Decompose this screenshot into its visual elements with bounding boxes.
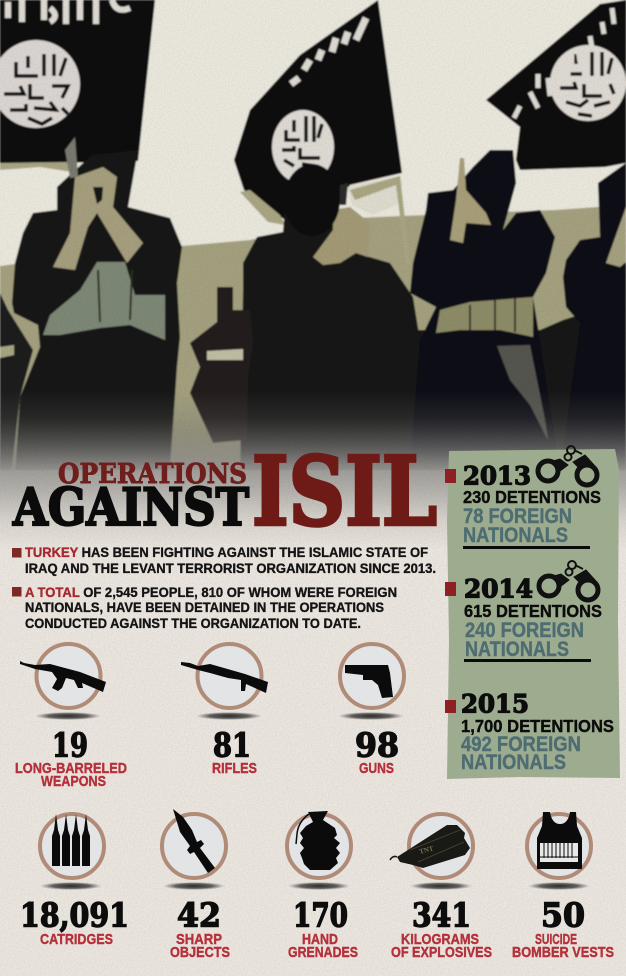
icon: grenade <box>296 811 340 870</box>
icon: pistol <box>345 665 393 698</box>
stat: rifles: RIFLES <box>212 761 257 777</box>
stat: guns <box>338 644 404 777</box>
stat: suicide bomber vests: BOMBER VESTS <box>512 945 614 961</box>
stat: guns: 98 <box>355 726 399 764</box>
icon: assault rifle <box>20 661 106 692</box>
intro paragraph 2 <box>12 585 397 631</box>
photo: masked fighters with black flags <box>0 0 626 470</box>
stat: rifles <box>181 644 268 777</box>
stat: guns: GUNS <box>359 761 394 777</box>
fighter left <box>12 137 182 470</box>
dark lower mass <box>240 290 626 470</box>
stat: long-barreled weapons: WEAPONS <box>41 774 106 790</box>
2013 block: 78 FOREIGN <box>463 505 572 528</box>
2015 block: NATIONALS <box>461 751 566 774</box>
title <box>12 436 437 548</box>
fighter far right <box>560 163 626 470</box>
fighter centre <box>243 164 420 470</box>
icon: bullets <box>52 814 90 866</box>
2015 block: 2015 <box>461 690 529 718</box>
stat: sharp objects: 42 <box>177 896 221 934</box>
intro paragraph 1 <box>12 545 436 576</box>
fighter background <box>190 287 253 443</box>
stat: long-barreled weapons: 19 <box>52 726 88 764</box>
stat: long-barreled weapons: LONG-BARRELED <box>15 761 127 777</box>
icon: TNT bundle: TNT <box>418 844 435 856</box>
icon: TNT bundle <box>390 825 470 868</box>
stat: sharp objects: SHARP <box>176 932 222 948</box>
fighter far left <box>0 293 33 470</box>
stat: cartridges: 18,091 <box>20 896 129 934</box>
2015 block: 1,700 DETENTIONS <box>461 716 614 736</box>
icon: handcuffs 2013 <box>538 446 597 485</box>
panel: detentions by year <box>445 446 620 779</box>
stat: sharp objects: OBJECTS <box>170 945 230 961</box>
stat: hand grenades: GRENADES <box>288 945 358 961</box>
stat: sharp objects <box>162 809 230 961</box>
stat: cartridges <box>20 814 129 948</box>
2013 block <box>445 462 601 549</box>
bullet <box>12 548 22 558</box>
2014 block: 240 FOREIGN <box>465 619 584 642</box>
2014 block: 615 DETENTIONS <box>464 601 602 621</box>
stat: suicide bomber vests: SUICIDE <box>535 932 577 948</box>
flag center <box>234 0 410 263</box>
stat: suicide bomber vests <box>512 812 614 961</box>
stat: hand grenades <box>287 811 358 961</box>
photo hillside <box>0 205 626 470</box>
title: against: AGAINST <box>12 478 249 538</box>
flag right <box>486 0 626 170</box>
stat: kilograms of explosives: KILOGRAMS <box>401 932 479 948</box>
title: ISIL: ISIL <box>252 436 437 548</box>
flag left <box>0 0 155 172</box>
photo sky <box>0 0 626 300</box>
stat: kilograms of explosives: 341 <box>412 896 471 934</box>
icon: vest <box>537 812 582 869</box>
bullet <box>12 587 22 596</box>
fighter right <box>410 150 560 470</box>
2014 block: 2014 <box>464 574 533 604</box>
stat: kilograms of explosives: OF EXPLOSIVES <box>391 945 492 961</box>
stat: long-barreled weapons <box>15 644 127 790</box>
photo fade to paper <box>0 360 626 550</box>
2015 block: 492 FOREIGN <box>461 733 581 756</box>
intro paragraph 2: NATIONALS, HAVE BEEN DETAINED IN THE OPERATIONS <box>25 600 384 615</box>
icon: rifle <box>181 662 268 693</box>
intro paragraph 2: A TOTAL OF 2,545 PEOPLE, 810 OF WHOM WERE FOREIGN <box>25 585 397 600</box>
stat: suicide bomber vests: 50 <box>541 896 585 934</box>
stat: cartridges: CATRIDGES <box>40 932 113 948</box>
2014 block <box>445 574 602 662</box>
2015 block <box>445 690 614 774</box>
icon: handcuffs 2014 <box>539 561 598 600</box>
stat: hand grenades: HAND <box>302 932 338 948</box>
stat: hand grenades: 170 <box>293 896 348 934</box>
2013 block: NATIONALS <box>463 524 568 547</box>
icon: knife <box>173 809 215 873</box>
intro paragraph 2: CONDUCTED AGAINST THE ORGANIZATION TO DATE. <box>25 616 361 631</box>
title: operations: OPERATIONS <box>58 459 247 490</box>
2013 block: 2013 <box>463 462 531 490</box>
2013 block: 230 DETENTIONS <box>463 487 601 507</box>
stat: kilograms of explosives <box>390 814 492 961</box>
stat: rifles: 81 <box>213 726 251 764</box>
intro paragraph 1: IRAQ AND THE LEVANT TERRORIST ORGANIZATION SINCE 2013. <box>25 561 436 576</box>
intro paragraph 1: TURKEY HAS BEEN FIGHTING AGAINST THE ISLAMIC STATE OF <box>25 545 428 560</box>
2014 block: NATIONALS <box>465 638 569 661</box>
